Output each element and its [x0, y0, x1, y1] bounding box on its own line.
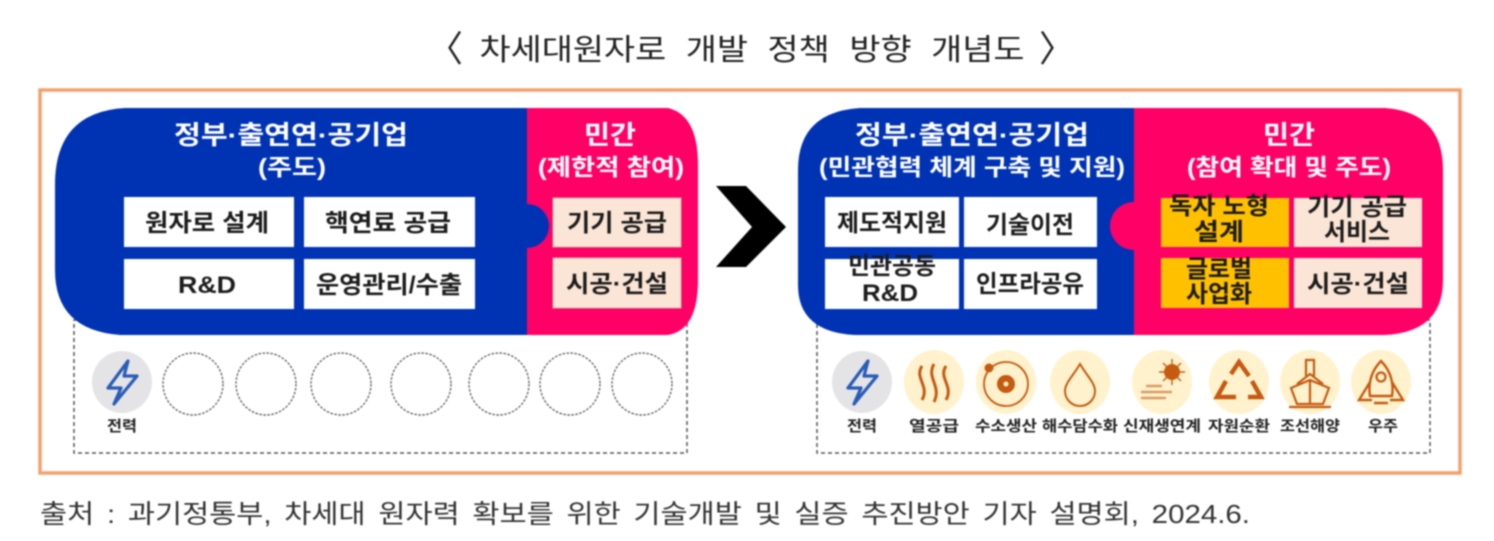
- subheading: public left: (주도): [258, 154, 326, 180]
- heading: public right: 정부·출연연·공기업: [855, 120, 1089, 150]
- title: [427, 28, 1075, 69]
- box: equipment supply service: [1294, 194, 1422, 247]
- icon: hydrogen production: [975, 350, 1037, 435]
- title: 〉: [1039, 28, 1075, 69]
- icon: electricity: 전력: [847, 418, 877, 435]
- blue public section right: [798, 108, 1146, 335]
- empty sector circles: [163, 353, 672, 415]
- icon: space: 우주: [1368, 418, 1398, 435]
- box: construction: 시공·건설: [566, 271, 668, 298]
- panel: current structure: [55, 108, 698, 453]
- box: technology transfer: [964, 197, 1097, 247]
- box: reactor design: 원자로 설계: [145, 210, 269, 237]
- icon: electricity: 전력: [107, 418, 137, 435]
- box: institutional support: [825, 197, 959, 247]
- heading: public left: 정부·출연연·공기업: [174, 120, 408, 150]
- pink private section left: [515, 108, 698, 335]
- pink private section right: [1110, 108, 1443, 335]
- box: infrastructure sharing: [964, 259, 1097, 309]
- icon: heat supply: 열공급: [909, 418, 959, 435]
- icon: resource recycling: 자원순환: [1208, 418, 1270, 435]
- box: own reactor design: 설계: [1194, 219, 1244, 246]
- box: R&D: [124, 259, 294, 309]
- heading: private right: 민간: [1263, 120, 1315, 150]
- subheading: private right: (참여 확대 및 주도): [1187, 154, 1391, 180]
- title: 〈: [427, 28, 463, 69]
- icon: hydrogen production: 수소생산: [975, 418, 1037, 435]
- box: construction: [1294, 258, 1422, 308]
- subheading: private left: (제한적 참여): [538, 154, 684, 180]
- box: global business: 사업화: [1186, 281, 1252, 308]
- source note: 출처 : 과기정통부, 차세대 원자력 확보를 위한 기술개발 및 실증 추진방안 기자 설명회, 2024.6.: [40, 499, 1250, 529]
- box: construction: [553, 258, 681, 308]
- box: equipment supply: [553, 198, 681, 247]
- panel: future structure: [798, 108, 1443, 453]
- icon: electricity: [832, 351, 892, 435]
- box: global business: 글로벌: [1186, 256, 1252, 283]
- box: joint R&D: R&D: [862, 280, 918, 307]
- box: fuel supply: [304, 197, 475, 247]
- blue public section left: [55, 108, 549, 335]
- box: R&D: R&D: [178, 272, 236, 299]
- title: 차세대원자로 개발 정책 방향 개념도: [480, 34, 1024, 67]
- icon: shipbuilding and ocean: 조선해양: [1280, 418, 1340, 435]
- icon: renewable integration: 신재생연계: [1123, 418, 1201, 435]
- box: institutional support: 제도적지원: [837, 210, 947, 237]
- box: joint R&D: [825, 253, 959, 309]
- dashed sector box left: [74, 320, 687, 453]
- icon: resource recycling: [1208, 350, 1270, 435]
- box: reactor design: [124, 197, 294, 247]
- box: equipment supply: 기기 공급: [567, 210, 667, 237]
- dashed sector box right: [817, 320, 1430, 453]
- icon: desalination: [1042, 350, 1118, 435]
- panel: concept diagram frame: [40, 90, 1460, 473]
- box: joint R&D: 민관공동: [848, 253, 936, 280]
- icon: desalination: 해수담수화: [1042, 418, 1118, 435]
- box: own reactor design: [1161, 193, 1289, 247]
- heading: private left: 민간: [584, 120, 636, 150]
- box: operation and export: [304, 259, 475, 309]
- subheading: public right: (민관협력 체계 구축 및 지원): [819, 154, 1125, 180]
- box: equipment supply service: 서비스: [1324, 219, 1390, 246]
- box: own reactor design: 독자 노형: [1169, 193, 1269, 220]
- arrow: transition chevron: [716, 186, 786, 267]
- box: equipment supply service: 기기 공급: [1307, 194, 1407, 221]
- box: technology transfer: 기술이전: [986, 212, 1074, 239]
- icon: shipbuilding and ocean: [1280, 350, 1340, 435]
- icon: electricity: [92, 351, 152, 435]
- icon: heat supply: [904, 350, 964, 435]
- box: construction: 시공·건설: [1307, 271, 1409, 298]
- box: fuel supply: 핵연료 공급: [325, 210, 451, 237]
- box: operation and export: 운영관리/수출: [316, 272, 462, 299]
- box: global business: [1161, 256, 1289, 308]
- icon: renewable integration: [1123, 350, 1201, 435]
- box: infrastructure sharing: 인프라공유: [976, 271, 1084, 298]
- icon: space: [1351, 350, 1411, 435]
